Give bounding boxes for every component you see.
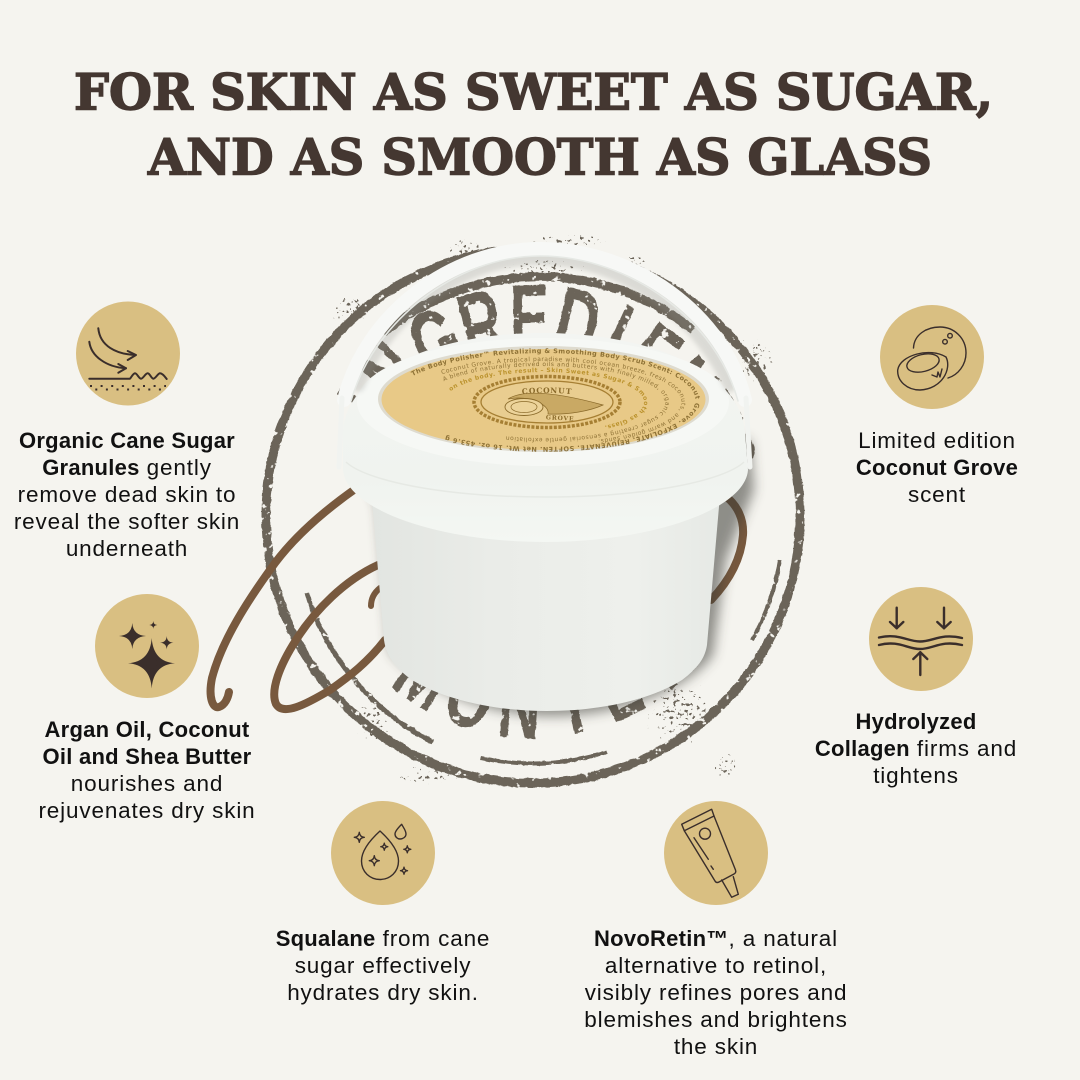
text: cane sugar: Granules gently — [42, 455, 212, 480]
title — [74, 62, 993, 186]
label curved text: A blend of naturally derived oils and butters with finely milled, organic sugar creating a sensorial gentle exfoliation — [444, 361, 669, 443]
icon: exfoliating arrows on skin — [76, 302, 180, 406]
stamp word: ingredients: D — [545, 266, 611, 380]
stamp word: ingredients: E — [604, 303, 700, 412]
stamp word: bottom: E — [575, 629, 657, 743]
label curved text: on the body. The result – Skin Sweet as Sugar & Smooth as Glass. — [450, 368, 648, 428]
label coconut seal: COCONUT — [522, 387, 572, 394]
jar shadow — [360, 420, 754, 716]
text: cane sugar: underneath — [66, 536, 188, 561]
panel: oils and butter — [38, 594, 256, 823]
jar label — [382, 348, 706, 452]
stamp word: ingredients: I — [318, 372, 416, 444]
text: squalane — [276, 926, 490, 1005]
text: cane sugar: reveal the softer skin — [14, 509, 240, 534]
title: AND AS SMOOTH AS GLASS — [147, 128, 932, 186]
stamp word: ingredients: N — [630, 338, 740, 440]
label curved text: Coconut Grove. A tropical paradise with cool ocean breeze, fresh coconuts, and warm golden sands. — [441, 356, 686, 444]
stamp word: bottom: R — [610, 600, 714, 708]
stamp word: ingredients: G — [391, 285, 483, 401]
text: coconut grove: scent — [908, 482, 966, 507]
stamp word: ingredients: N — [340, 323, 446, 429]
text: squalane: hydrates dry skin. — [287, 980, 479, 1005]
text: coconut grove — [856, 428, 1018, 507]
text: oils and butter — [38, 717, 256, 823]
icon: coconut — [880, 305, 984, 409]
icon: droplets with sparkles — [331, 801, 435, 905]
panel: novoretin — [584, 801, 848, 1059]
text: collagen — [815, 709, 1017, 788]
text: squalane: Squalane from cane — [276, 926, 490, 951]
stamp rings — [266, 249, 800, 783]
text: novoretin: blemishes and brightens — [584, 1007, 848, 1032]
text: oils and butter: Oil and Shea Butter — [43, 744, 251, 769]
text: coconut grove: Limited edition — [858, 428, 1016, 453]
text: oils and butter: Argan Oil, Coconut — [45, 717, 249, 742]
stamp word: ingredients: T — [651, 378, 762, 462]
text: collagen: Collagen firms and — [815, 736, 1017, 761]
label curved text: The Body Polisher™ Revitalizing & Smoothing Body Scrub Scent: Coconut Grove. EXFOLIATE. REJUVENATE. SOFTEN. Net Wt. 16 oz. 453.6 g — [410, 348, 700, 452]
icon: sparkles — [95, 594, 199, 698]
text: collagen: Hydrolyzed — [855, 709, 977, 734]
label coconut seal — [472, 374, 622, 430]
text: novoretin — [584, 926, 848, 1059]
stamp word: bottom: M — [377, 614, 478, 731]
stamp word: bottom — [377, 600, 714, 759]
text: novoretin: visibly refines pores and — [585, 980, 847, 1005]
stamp word: ingredients: R — [447, 267, 516, 382]
title: FOR SKIN AS SWEET AS SUGAR, — [74, 62, 993, 122]
text: novoretin: NovoRetin™, a natural — [594, 926, 838, 951]
text: oils and butter: rejuvenates dry skin — [38, 798, 256, 823]
stamp word: bottom: O — [432, 637, 511, 753]
brown script swashes — [211, 487, 743, 709]
stamp word: ingredients: S — [664, 419, 778, 490]
text: novoretin: alternative to retinol, — [605, 953, 827, 978]
text: squalane: sugar effectively — [295, 953, 471, 978]
text: novoretin: the skin — [674, 1034, 758, 1059]
label coconut seal: GROVE — [546, 414, 574, 423]
text: collagen: tightens — [873, 763, 959, 788]
text: coconut grove: Coconut Grove — [856, 455, 1018, 480]
text: cane sugar: remove dead skin to — [18, 482, 236, 507]
text: cane sugar — [14, 428, 240, 561]
icon: firming arrows — [869, 587, 973, 691]
panel: hydrolyzed collagen — [815, 587, 1017, 788]
stamp speckles — [322, 230, 783, 789]
stamp word: ingredients — [318, 264, 778, 490]
stamp word: bottom: N — [495, 650, 545, 759]
text: oils and butter: nourishes and — [71, 771, 223, 796]
stamp word: ingredients: E — [509, 264, 550, 372]
text: cane sugar: Organic Cane Sugar — [19, 428, 235, 453]
panel: squalane — [276, 801, 490, 1005]
stamp word: ingredients: I — [587, 285, 647, 388]
jar handle — [339, 249, 750, 467]
jar body — [372, 495, 720, 711]
stamp word: bottom: T — [543, 645, 601, 757]
icon: tube — [664, 801, 768, 905]
ingredients stamp — [266, 230, 800, 789]
jar — [346, 333, 748, 711]
panel: coconut grove scent — [856, 305, 1018, 507]
panel: cane sugar granules — [14, 302, 240, 561]
jar lid — [343, 333, 748, 542]
